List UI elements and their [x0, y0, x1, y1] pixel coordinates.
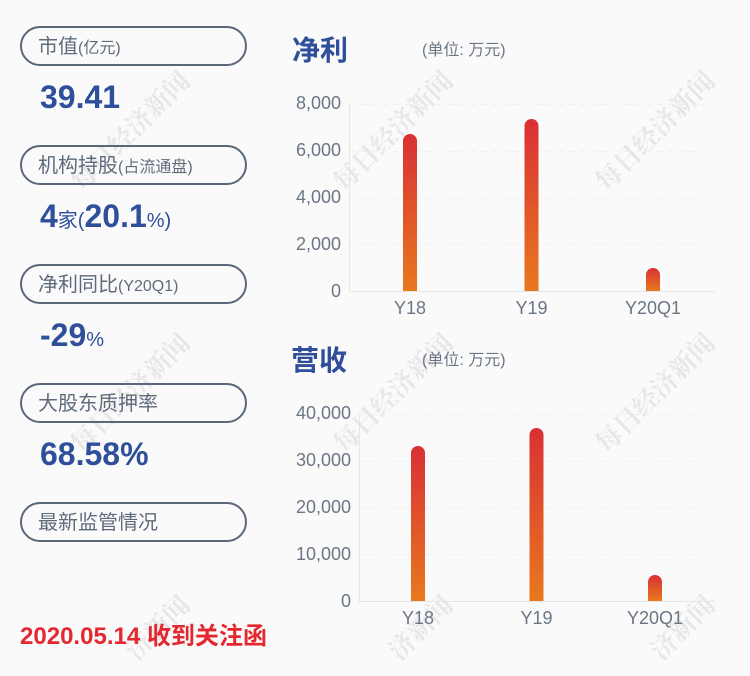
metric: net profit yoy: [21, 265, 246, 353]
watermarks: 济新闻: [645, 590, 721, 666]
chart: revenue: 30,000: [296, 450, 351, 470]
watermarks: 每日经济新闻: [65, 328, 196, 459]
chart: net profit: 6,000: [296, 140, 341, 160]
chart: revenue: Y20Q1: [627, 608, 683, 628]
metric: latest regulation: 最新监管情况: [38, 511, 158, 534]
chart: revenue: 20,000: [296, 497, 351, 517]
chart: revenue: 10,000: [296, 544, 351, 564]
metric: institutional holdings: 4家(20.1%): [40, 198, 171, 234]
watermarks: 济新闻: [120, 590, 196, 666]
chart: net profit: 0: [331, 281, 341, 301]
heading: revenue: 营收: [291, 345, 347, 376]
metric: institutional holdings: [21, 146, 246, 234]
regulatory note: 2020.05.14 收到关注函: [20, 623, 267, 650]
watermarks: 济新闻: [383, 590, 459, 666]
watermarks: 每日经济新闻: [590, 66, 721, 197]
chart: revenue: [296, 403, 715, 628]
watermarks: [65, 66, 721, 666]
metric: major shareholder pledge: 68.58%: [40, 436, 149, 472]
metric: major shareholder pledge: 大股东质押率: [38, 392, 158, 415]
chart: net profit: 2,000: [296, 234, 341, 254]
chart: net profit: Y20Q1: [625, 298, 681, 318]
watermarks: 每日经济新闻: [328, 66, 459, 197]
heading: revenue: (单位: 万元): [422, 351, 506, 369]
chart: net profit: Y18: [394, 298, 426, 318]
heading: revenue: [291, 345, 506, 376]
watermarks: 每日经济新闻: [590, 328, 721, 459]
heading: net profit: 净利: [292, 35, 348, 66]
chart: net profit: Y19: [515, 298, 548, 318]
watermarks: 每日经济新闻: [328, 328, 459, 459]
metric: market value: [21, 27, 246, 115]
heading: net profit: (单位: 万元): [422, 41, 506, 59]
metric: net profit yoy: 净利同比(Y20Q1): [38, 273, 178, 296]
chart: net profit: 4,000: [296, 187, 341, 207]
heading: net profit: [292, 35, 506, 66]
metric: net profit yoy: -29%: [40, 317, 104, 353]
metric: latest regulation: [21, 503, 246, 541]
chart: net profit: [296, 93, 715, 318]
chart: revenue: 40,000: [296, 403, 351, 423]
chart: net profit: 8,000: [296, 93, 341, 113]
watermarks: 每日经济新闻: [65, 66, 196, 197]
chart: revenue: Y19: [520, 608, 553, 628]
metric: market value: 39.41: [40, 79, 120, 115]
chart: revenue: Y18: [402, 608, 434, 628]
metric: institutional holdings: 机构持股(占流通盘): [38, 154, 193, 177]
metric: market value: 市值(亿元): [38, 35, 121, 58]
metric: major shareholder pledge: [21, 384, 246, 472]
chart: revenue: 0: [341, 591, 351, 611]
